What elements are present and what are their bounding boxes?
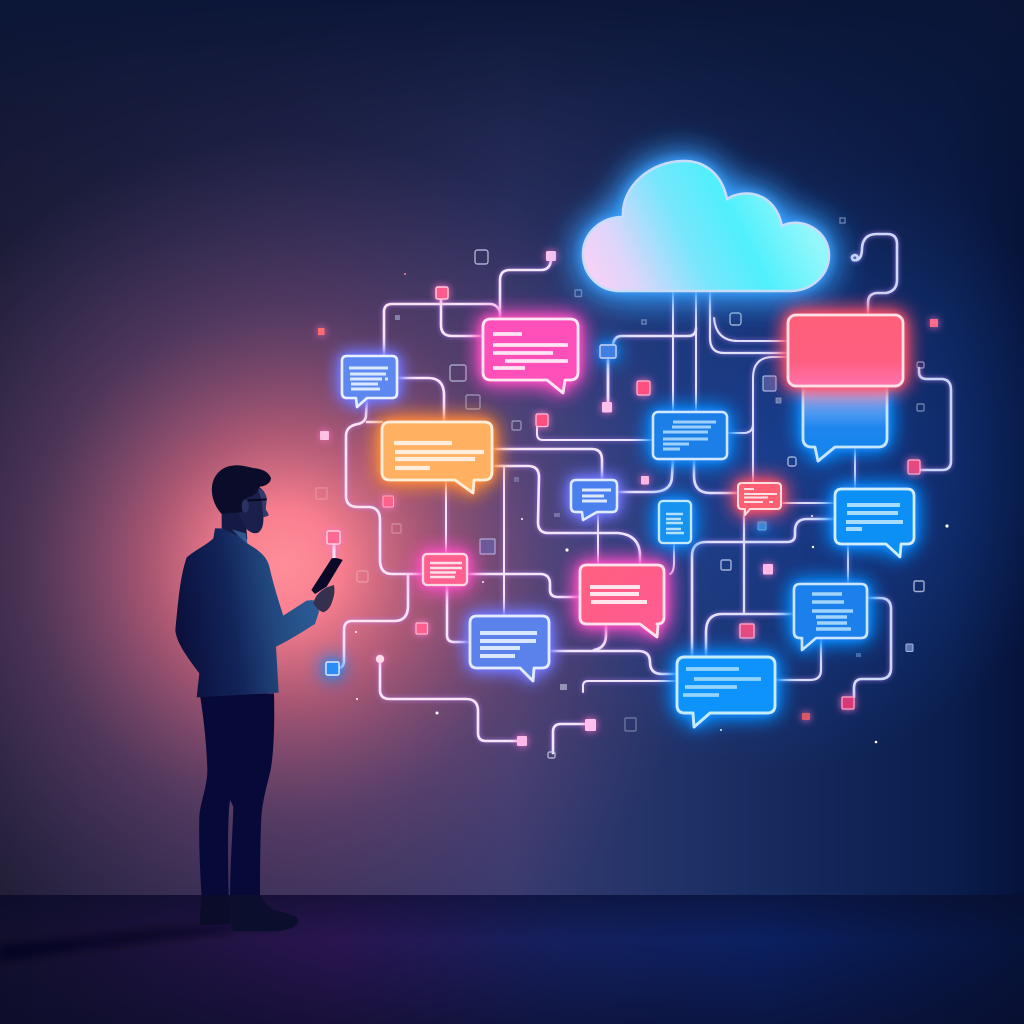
speech bubble: red center — [580, 565, 664, 637]
node: upper right red — [930, 319, 938, 327]
node: small blue — [758, 522, 766, 530]
node: bottom pale 2 — [585, 719, 596, 731]
speech bubble: big blue bottom — [677, 657, 775, 727]
speech bubble: small blue left — [342, 356, 397, 407]
cloud — [583, 161, 829, 291]
blue nodes — [326, 345, 766, 675]
small outlined decorative squares — [316, 218, 924, 758]
tiny star dots — [355, 273, 949, 743]
node: lower pale — [763, 564, 773, 574]
node: mid red 2 — [536, 414, 548, 426]
right shoe — [230, 895, 298, 931]
node: far right pink — [842, 697, 854, 709]
node: start dot — [376, 655, 384, 663]
hand — [313, 585, 334, 612]
rounded panel: blue center — [653, 412, 727, 459]
floor shadow of the person — [0, 924, 235, 962]
node: phone link — [327, 531, 340, 544]
node: left outlined red — [383, 496, 394, 507]
document card: blue — [659, 501, 691, 543]
speech bubble: pink — [483, 319, 578, 393]
node: mid pale 2 — [641, 476, 649, 484]
small filled grey and blue squares — [395, 315, 913, 690]
speech bubble: blue mid right — [794, 584, 867, 650]
node: left red — [318, 328, 324, 335]
connector lines network — [334, 234, 951, 753]
neck — [222, 512, 247, 539]
node: lower left red — [416, 623, 428, 634]
node: lower red — [740, 624, 754, 638]
face — [237, 486, 269, 533]
node: bottom dim red — [802, 713, 810, 720]
node: mid pale — [602, 402, 612, 412]
node: pink top — [546, 251, 556, 261]
speech bubble: small red — [738, 483, 781, 515]
panel: red top block — [788, 315, 903, 386]
speech bubble: two-tone blue lower part — [803, 380, 887, 461]
node: right pink — [908, 460, 920, 474]
node: mid red 1 — [637, 381, 650, 395]
node: blue by phone — [326, 662, 339, 675]
phone — [311, 558, 343, 594]
collar — [232, 529, 247, 544]
person silhouette — [175, 465, 343, 931]
left shoe — [200, 895, 230, 925]
face highlight — [257, 487, 269, 517]
glowing node squares — [318, 251, 938, 746]
ear — [242, 499, 249, 513]
node: blue rectangle mid — [600, 345, 616, 358]
node: red top — [436, 287, 448, 299]
jacket — [175, 528, 319, 697]
speech bubble: orange — [382, 422, 492, 493]
legs — [199, 693, 274, 898]
node: bottom pale 1 — [517, 736, 527, 746]
speech bubble: small blue center — [571, 480, 617, 520]
speech bubble: pink small — [423, 554, 467, 585]
speech bubble: blue right — [835, 489, 914, 557]
hair — [212, 465, 271, 514]
speech bubble: blue lower left — [470, 616, 549, 681]
node: left pale — [320, 431, 329, 440]
floor — [0, 895, 1024, 1024]
glasses — [247, 499, 267, 501]
